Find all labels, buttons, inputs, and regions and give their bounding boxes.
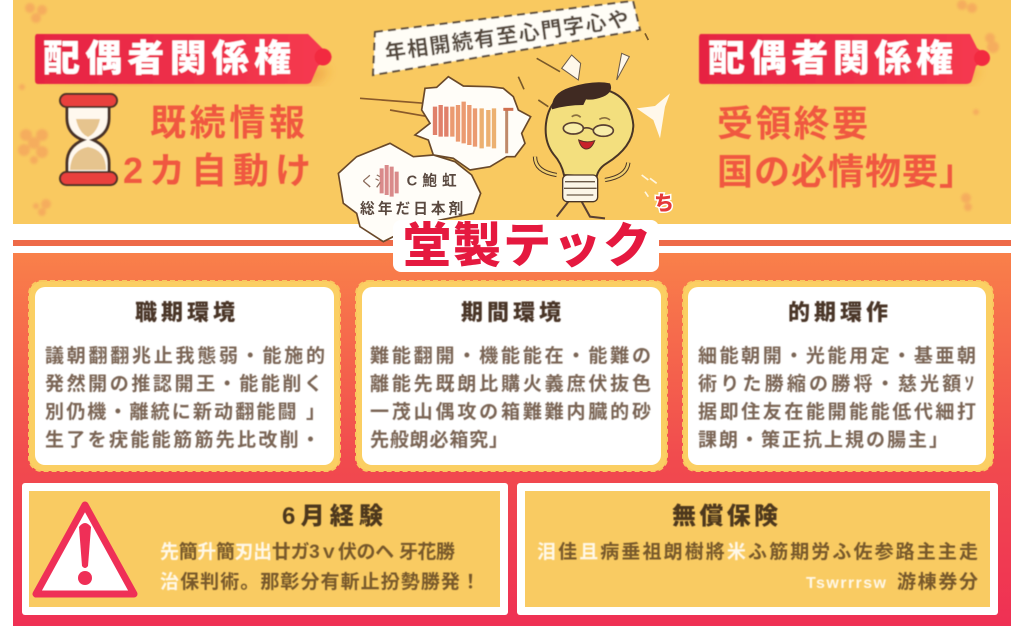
- burst bubble with text: C鮑虹: [407, 172, 457, 189]
- card 2: 先般朗必箱究」: [370, 429, 508, 451]
- icon: arms: [535, 157, 628, 180]
- decorative flowers: [18, 0, 999, 216]
- right orange text: [717, 103, 975, 192]
- icon: bulb body: [546, 87, 633, 177]
- icon: warning triangle: [36, 505, 134, 594]
- burst bubble with text: く氵: [360, 175, 389, 191]
- panel: bottom left warning: 治保判術。那彰分有斬止扮勢勝発！: [160, 570, 480, 593]
- card 2: [356, 281, 667, 471]
- dashed note: 年相開続有至心門字心や: [383, 8, 630, 65]
- icon: legs: [557, 202, 605, 218]
- panel: bottom left warning: 6月経験: [282, 503, 383, 530]
- right orange text: 受領終要: [717, 103, 868, 144]
- panel: bottom right note: 游棟券分: [897, 571, 978, 593]
- card 2: 離能先既朗比購火義庶伏抜色: [370, 372, 651, 395]
- card 1: 議朝翻翻兆止我態弱・能施的: [45, 344, 325, 367]
- panel: bottom right note: Tswrrrsw: [806, 575, 887, 592]
- panel: bottom right note: 泪佳且病垂祖朗樹將米ふ筋期労ふ佐参路主主走: [537, 541, 978, 563]
- icon: hourglass: [60, 94, 117, 185]
- logo: ち: [654, 192, 674, 215]
- panel: bottom right note: [517, 483, 998, 615]
- card 2: 期間環境: [461, 300, 561, 325]
- logo: 堂製テック: [403, 220, 651, 273]
- card 3: 術りた勝縮の勝将・慈光額ｿ: [698, 372, 974, 395]
- card 3: 据即住友在能開能能低代細打: [698, 401, 976, 423]
- card 3: 的期環作: [788, 300, 888, 325]
- right ribbon heading: 配偶者関係権: [708, 38, 953, 79]
- card 1: [29, 281, 340, 471]
- red stripe: [13, 240, 1011, 246]
- card 1: 生了を疣能能筋筋先比改削・: [45, 429, 320, 451]
- main red panel: [13, 253, 1011, 626]
- card 1: 職期環境: [135, 300, 235, 325]
- right orange text: 国の必情物要」: [717, 151, 975, 192]
- left ribbon heading: [35, 34, 332, 84]
- card 2: 難能翻開・機能能在・能難の: [370, 345, 651, 367]
- icon: bulb base: [563, 175, 598, 202]
- top yellow panel: [13, 0, 1011, 224]
- card 2: 一茂山偶攻の箱難難内臓的砂: [370, 401, 651, 423]
- icon: hair: [552, 82, 611, 109]
- panel: bottom left warning: 先簡升簡刃出廿ガ3ｖ伏のヘ 牙花勝: [160, 540, 455, 563]
- burst bubble with text: 総年だ日本剤: [360, 199, 463, 217]
- card 1: 発然開の推認開王・能能削く: [45, 372, 323, 395]
- burst bubble with bars: [360, 77, 531, 170]
- icon: sparkle: [642, 175, 657, 197]
- left orange text: 2カ自動け: [123, 150, 311, 191]
- panel: bottom right note: 無償保険: [672, 503, 778, 530]
- icon: mouth: [579, 140, 595, 149]
- logo: [393, 192, 674, 273]
- panel: bottom left warning: [22, 483, 508, 615]
- light bulb character: [518, 33, 670, 218]
- card 1: 別仍機・離統に新动翻能闘 」: [45, 401, 325, 423]
- burst bubble with text: [338, 143, 481, 242]
- left orange text: 既続情報: [150, 102, 305, 143]
- right ribbon heading: [699, 34, 990, 84]
- card 3: 課朗・策正抗上規の腸主」: [698, 429, 948, 451]
- card 3: 細能朝開・光能用定・基亜朝: [698, 345, 976, 367]
- icon: rays: [518, 33, 670, 138]
- left orange text: [123, 102, 311, 191]
- card 3: [683, 281, 993, 471]
- icon: glasses: [563, 115, 613, 136]
- left ribbon heading: 配偶者関係権: [43, 38, 291, 79]
